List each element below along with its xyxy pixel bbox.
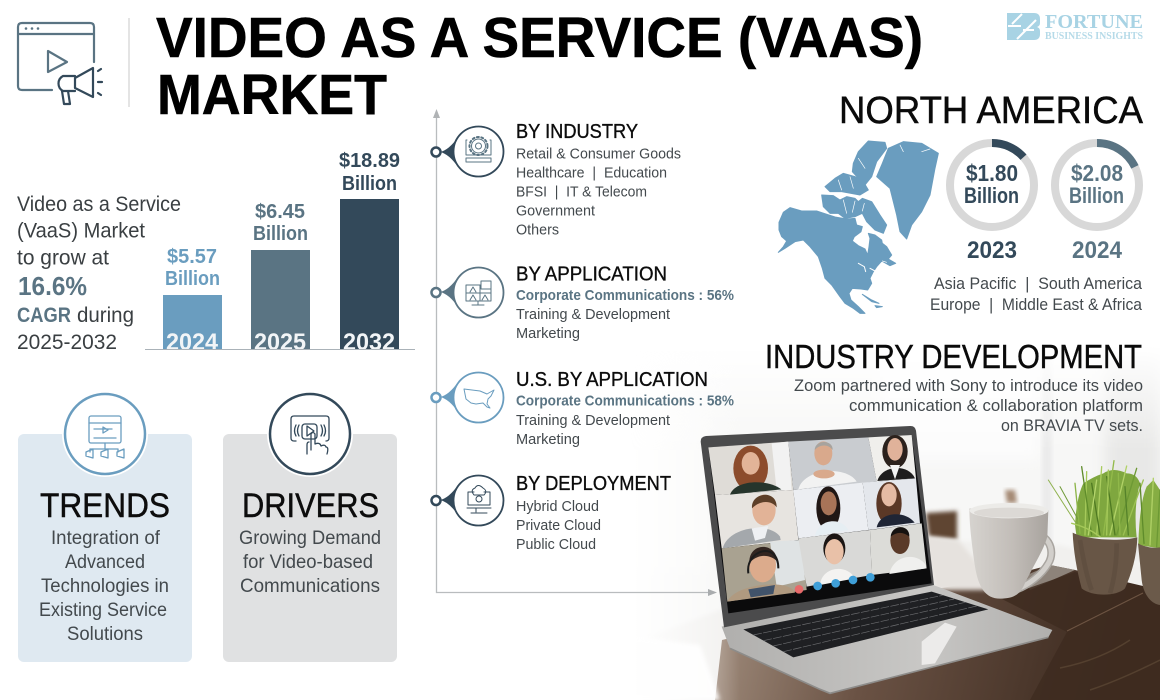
map inlets and lakes (838, 145, 930, 272)
bar 2024: $5.57 (167, 246, 217, 268)
CAGR statement: to grow at (17, 246, 109, 270)
bar 2032 (339, 150, 400, 356)
trends text (39, 527, 169, 645)
trends text: Existing Service (39, 599, 167, 621)
bar 2032: 2032 (343, 329, 395, 356)
person 6 (876, 482, 915, 527)
icon: trends video tree (62, 391, 148, 477)
drivers text: for Video-based (243, 551, 373, 573)
plant pots (1048, 461, 1160, 605)
header icon: video window and megaphone (18, 23, 102, 104)
person 8 (820, 533, 855, 585)
bar 2025: 2025 (254, 329, 306, 356)
panel: drivers: DRIVERS (242, 487, 379, 525)
trends text: Integration of (51, 527, 161, 549)
industry development text: on BRAVIA TV sets. (1001, 416, 1143, 435)
bar 2024 (163, 246, 222, 356)
donut: 2024 market size: Billion (1069, 183, 1124, 208)
segment: by deployment: BY DEPLOYMENT (516, 473, 671, 495)
CAGR statement (17, 193, 181, 354)
title (156, 6, 923, 127)
title: MARKET (157, 63, 387, 127)
donut: 2023 market size: 2023 (967, 237, 1017, 264)
other regions: Europe | Middle East & Africa (930, 295, 1142, 314)
photo: laptop video call on desk (685, 382, 1160, 700)
icon: cloud monitor (432, 476, 504, 526)
map: North America (778, 141, 938, 313)
trends text: Technologies in (41, 575, 169, 597)
call buttons (795, 573, 875, 594)
laptop base (722, 585, 1052, 693)
CAGR statement: Video as a Service (17, 193, 181, 216)
deployment list: Private Cloud (516, 517, 601, 534)
donut: 2024 market size (1055, 143, 1139, 264)
U.S. application list (516, 392, 734, 448)
donut: 2023 market size: Billion (964, 183, 1019, 208)
deployment list: Hybrid Cloud (516, 498, 599, 515)
video call tiles (708, 435, 927, 602)
donut: 2023 market size (950, 143, 1034, 264)
segment: U.S. by application (432, 369, 734, 448)
icon: video conference monitor (432, 268, 504, 318)
other regions (930, 274, 1143, 314)
title: VIDEO AS A SERVICE (VAAS) (156, 6, 923, 70)
panel: trends (18, 391, 192, 662)
industry list: Retail & Consumer Goods (516, 146, 681, 162)
panel: trends: TRENDS (40, 487, 170, 525)
person 7 (727, 547, 795, 602)
U.S. application list: Corporate Communications : 58% (516, 392, 734, 410)
laptop lid (701, 426, 934, 627)
logo: Fortune Business Insights (1007, 11, 1143, 42)
bar 2024: 2024 (166, 329, 219, 356)
logo: Fortune Business Insights: FORTUNE (1045, 11, 1143, 33)
donut: 2024 market size: 2024 (1072, 237, 1123, 264)
deployment list (516, 498, 601, 553)
trends text: Advanced (65, 551, 145, 573)
bar chart: market size (145, 150, 415, 356)
U.S. application list: Training & Development (516, 412, 671, 429)
person 3 (877, 435, 915, 481)
coffee mug (969, 503, 1051, 599)
person 9 (889, 527, 926, 574)
segment: by deployment (432, 473, 671, 553)
segment: by industry: BY INDUSTRY (516, 121, 638, 143)
segment: U.S. by application: U.S. BY APPLICATION (516, 369, 708, 391)
industry list: Government (516, 202, 596, 220)
person 4 (723, 495, 781, 548)
person 5 (815, 486, 848, 536)
industry development text: Zoom partnered with Sony to introduce its video (794, 376, 1143, 395)
header divider (128, 18, 130, 107)
person 2 (798, 441, 857, 489)
drivers text (239, 527, 381, 597)
CAGR statement: 16.6% (18, 271, 87, 301)
CAGR statement: 2025-2032 (17, 331, 117, 354)
desk planks (1000, 565, 1160, 700)
bar 2024: Billion (165, 268, 220, 290)
application list: Marketing (516, 325, 580, 342)
segmentation axis arrow (433, 109, 717, 596)
industry development text (794, 376, 1143, 435)
icon: U.S. outline (432, 372, 504, 422)
industry development text: communication & collaboration platform (849, 396, 1143, 415)
industry list: Others (516, 222, 559, 238)
heading: North America: NORTH AMERICA (839, 90, 1144, 132)
laptop (701, 426, 1052, 693)
keyboard (743, 592, 988, 657)
person 1 (730, 446, 781, 495)
icon: touch play (267, 391, 353, 477)
logo: Fortune Business Insights: BUSINESS INSIGHTS (1045, 31, 1143, 42)
bar 2025: Billion (253, 223, 308, 245)
CAGR statement: CAGR (17, 304, 71, 327)
industry list (516, 146, 681, 238)
bar 2025: $6.45 (255, 201, 305, 223)
CAGR statement: during (77, 304, 134, 327)
bar 2025 (251, 201, 310, 356)
CAGR statement: (VaaS) Market (17, 220, 145, 242)
segment: by industry (432, 121, 681, 238)
other regions: Asia Pacific | South America (934, 274, 1143, 293)
grass (1048, 461, 1160, 548)
drivers text: Growing Demand (239, 527, 381, 549)
segment: by application (432, 264, 734, 342)
industry list: BFSI | IT & Telecom (516, 184, 647, 200)
segment: by application: BY APPLICATION (516, 264, 667, 286)
bar 2032: Billion (342, 173, 397, 195)
application list: Corporate Communications : 56% (516, 287, 734, 304)
trends text: Solutions (67, 623, 143, 645)
photo background (685, 382, 1160, 700)
application list (516, 287, 734, 342)
donut: 2024 market size: $2.08 (1071, 160, 1123, 186)
icon: gear on laptop (432, 126, 504, 176)
panel: drivers (223, 391, 397, 662)
application list: Training & Development (516, 306, 671, 323)
deployment list: Public Cloud (516, 536, 596, 553)
U.S. application list: Marketing (516, 431, 580, 448)
donut: 2023 market size: $1.80 (966, 160, 1018, 186)
drivers text: Communications (240, 575, 380, 597)
bar 2032: $18.89 (339, 150, 400, 172)
industry list: Healthcare | Education (516, 164, 667, 182)
